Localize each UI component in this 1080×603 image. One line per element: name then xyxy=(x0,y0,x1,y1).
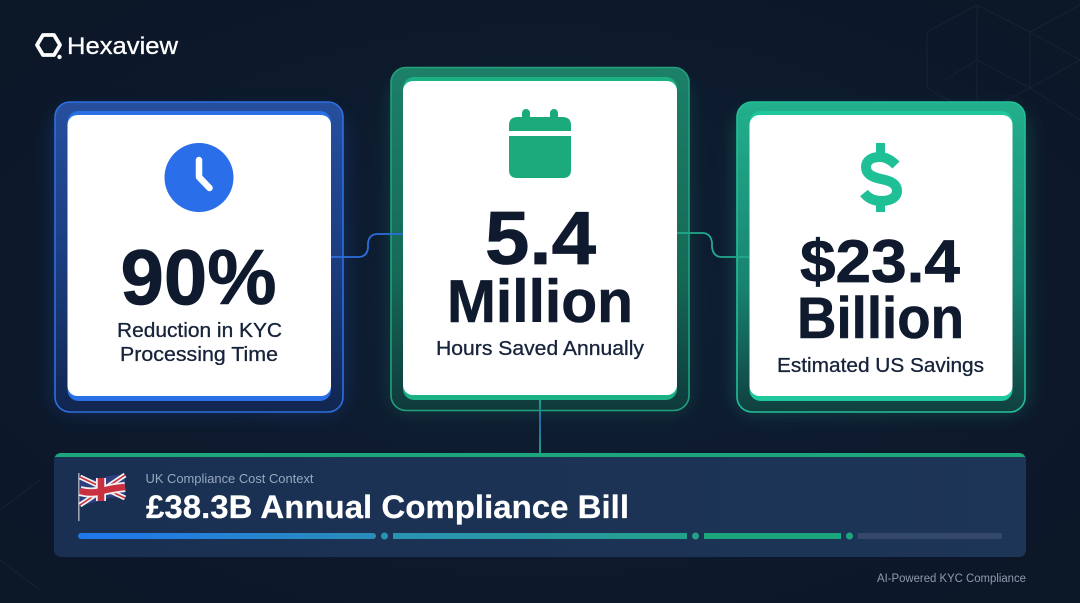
panel: 5.4 million hours xyxy=(388,68,692,414)
logo xyxy=(37,33,179,60)
card body xyxy=(403,81,677,395)
stat label xyxy=(117,319,282,366)
label line 1: Reduction in KYC xyxy=(117,319,282,342)
connector: card 2 to panel xyxy=(539,400,541,453)
stat label: Hours Saved Annually xyxy=(436,337,645,360)
card accent edge xyxy=(750,111,1012,401)
icon: UK flag xyxy=(78,473,125,521)
logo wordmark: Hexaview xyxy=(67,33,179,60)
connector: card 2 to card 3 xyxy=(677,233,749,257)
panel body xyxy=(54,457,1026,557)
footer tagline: AI-Powered KYC Compliance xyxy=(877,573,1026,585)
panel subtitle: UK Compliance Cost Context xyxy=(146,471,314,486)
label line 2: Processing Time xyxy=(120,343,278,366)
card frame xyxy=(391,68,689,410)
icon: calendar xyxy=(509,109,571,178)
panel: UK compliance cost xyxy=(54,453,1026,557)
progress bar xyxy=(78,532,1002,540)
card frame xyxy=(55,102,343,412)
icon: clock xyxy=(164,143,234,212)
card glow xyxy=(52,110,346,414)
stat value: 90% xyxy=(120,233,276,321)
card body xyxy=(68,115,331,396)
stat value line 2: Billion xyxy=(797,286,964,351)
card accent edge xyxy=(68,111,331,401)
stat value line 2: Million xyxy=(447,268,633,335)
panel top edge xyxy=(54,453,1026,483)
stat label: Estimated US Savings xyxy=(777,354,984,377)
card accent edge xyxy=(403,77,677,400)
card glow xyxy=(388,80,692,414)
icon: dollar sign xyxy=(864,143,897,212)
panel: 90% reduction xyxy=(52,102,346,414)
connector: card 1 to card 2 xyxy=(331,234,403,257)
stat value line 1: 5.4 xyxy=(485,196,596,280)
icon: hexagon logo xyxy=(37,35,62,59)
card body xyxy=(750,115,1012,396)
card glow xyxy=(734,110,1028,414)
panel: $23.4 billion xyxy=(734,102,1028,414)
stat value line 1: $23.4 xyxy=(800,228,961,295)
panel headline: £38.3B Annual Compliance Bill xyxy=(146,489,629,525)
card frame xyxy=(737,102,1025,412)
